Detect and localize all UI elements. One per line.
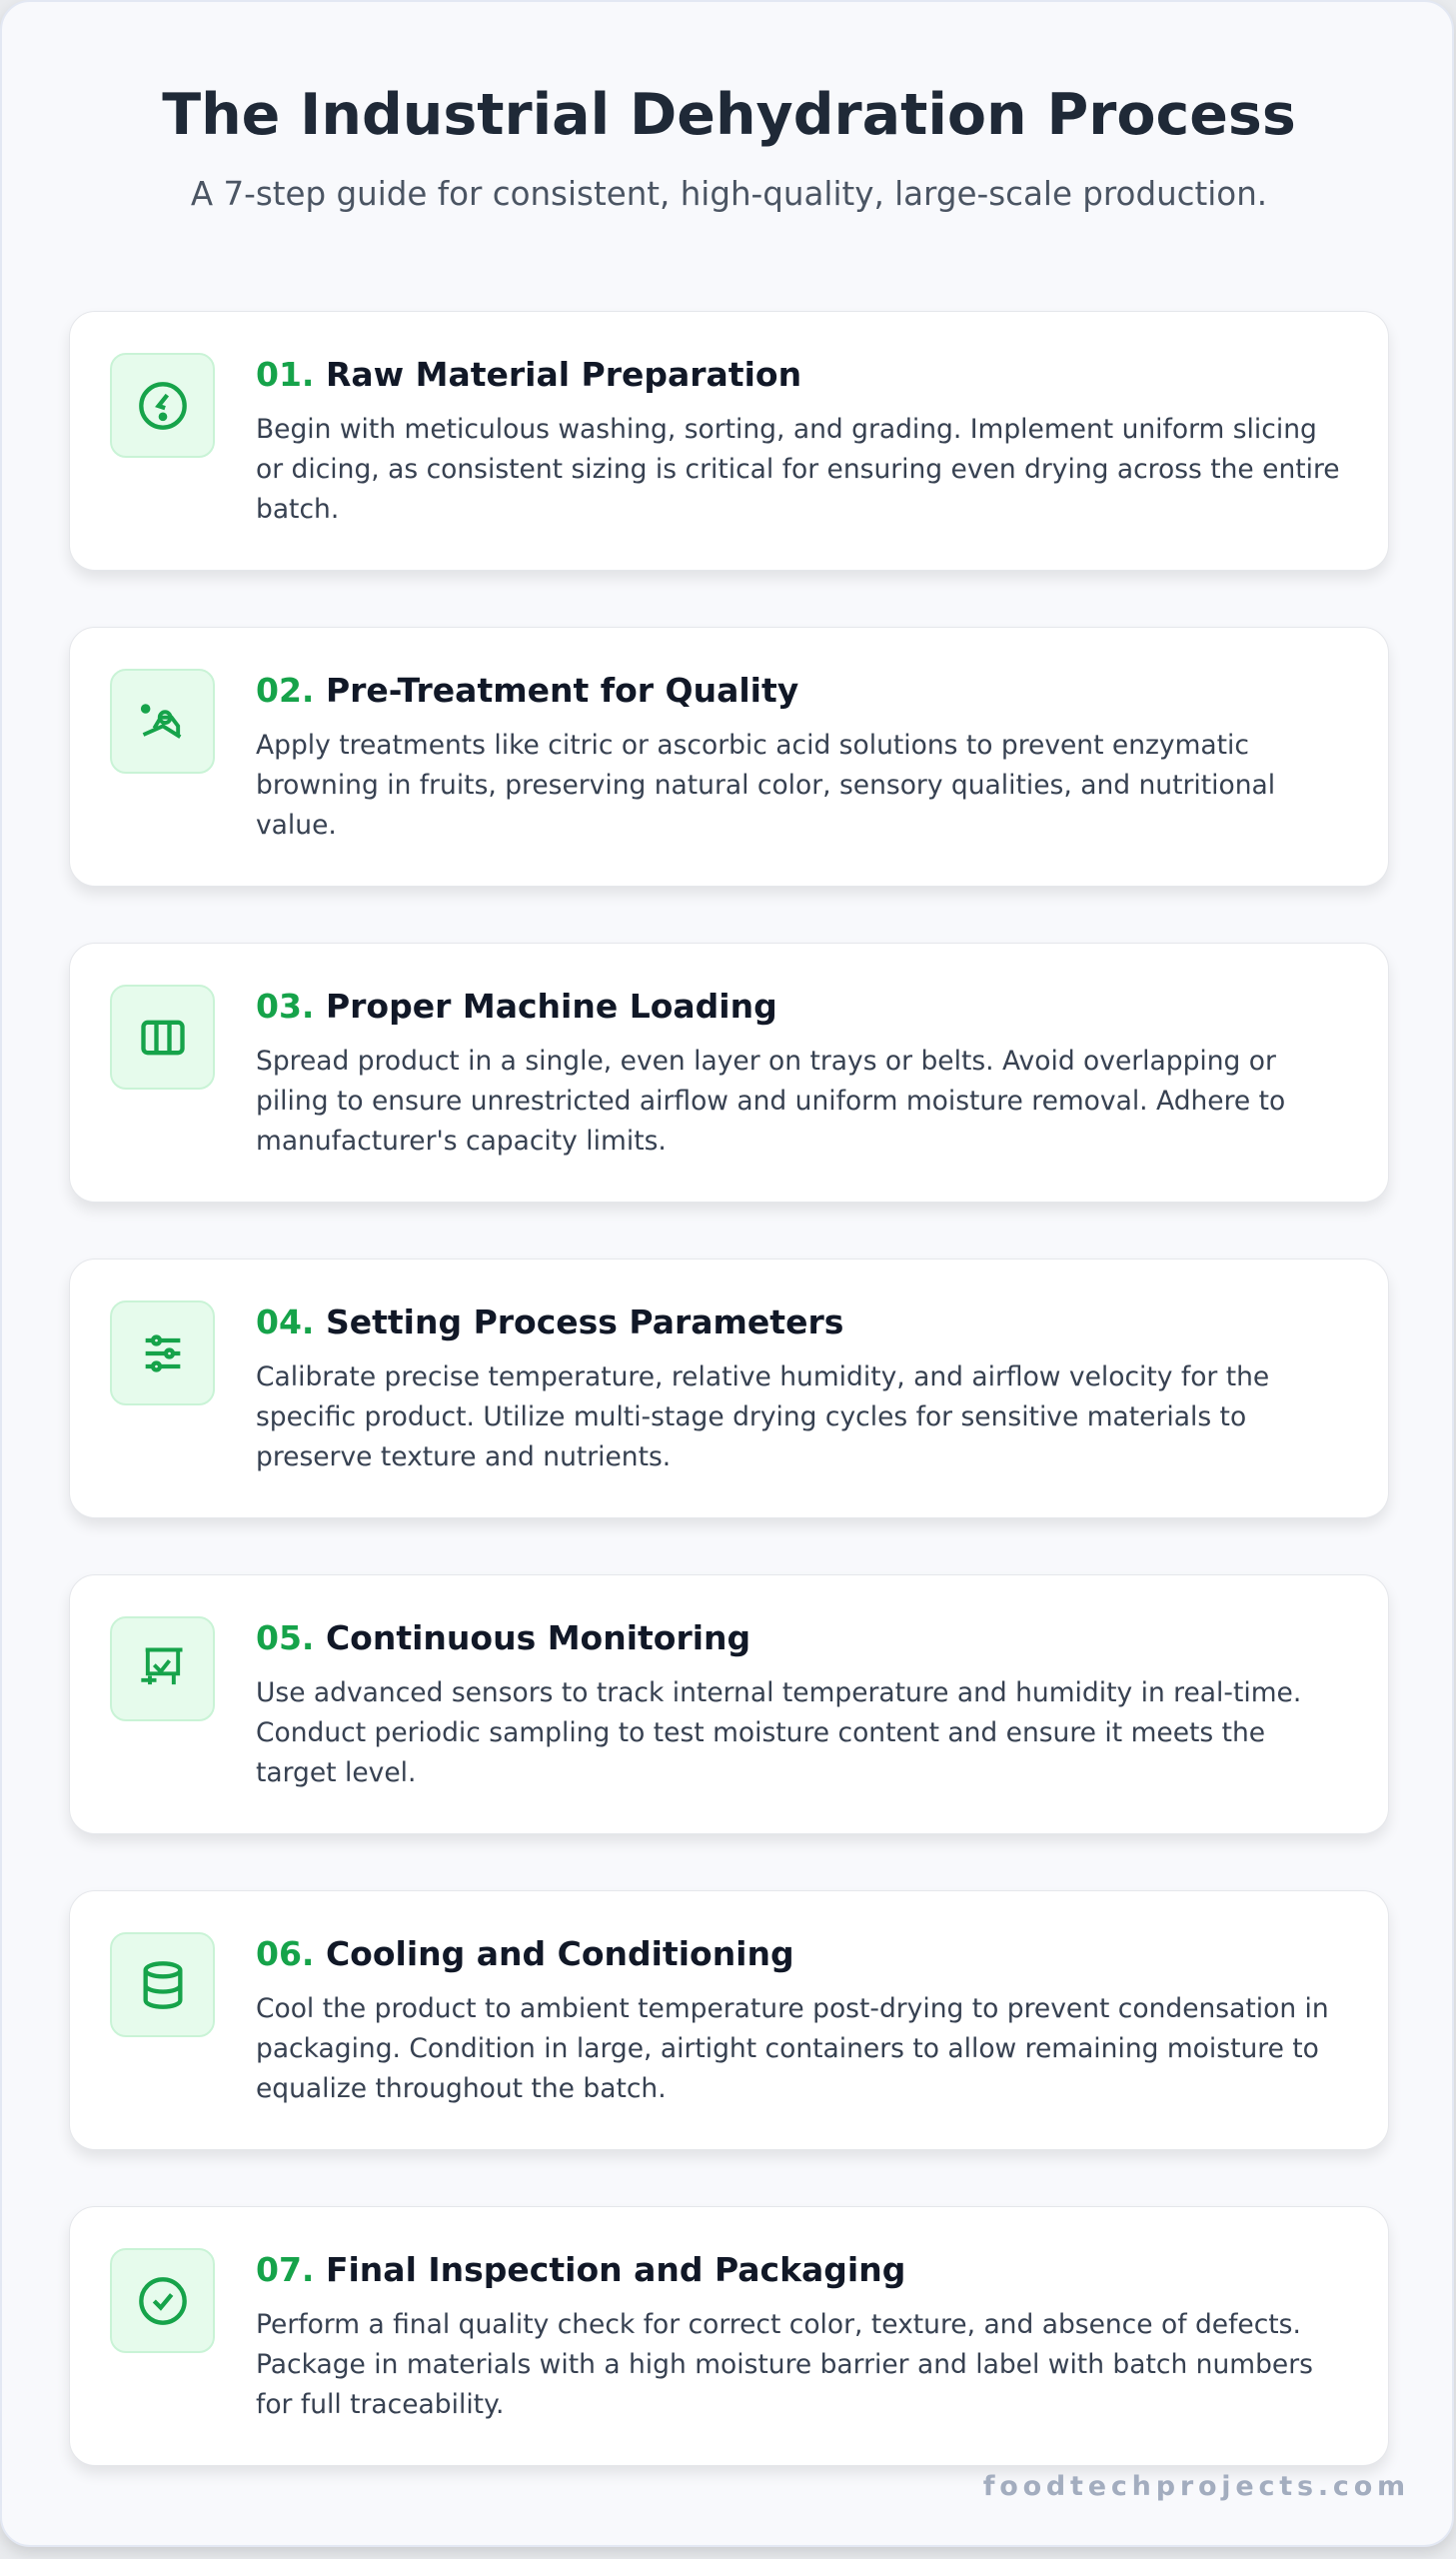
description: Calibrate precise temperature, relative humidity, and airflow velocity for the specific product. Utilize multi-stage drying cycles for sensitive materials to preserve texture and nutrients. xyxy=(256,1361,1269,1472)
icon: monitor xyxy=(110,1616,215,1721)
heading: 03. Proper Machine Loading xyxy=(256,987,777,1026)
card: step 6 xyxy=(69,1890,1389,2150)
card: step 7 xyxy=(69,2206,1389,2466)
icon: compass xyxy=(110,353,215,458)
description: Use advanced sensors to track internal temperature and humidity in real-time. Conduct periodic sampling to test moisture content and ensure it meets the target level. xyxy=(256,1677,1301,1788)
icon: check xyxy=(110,2248,215,2353)
description: Perform a final quality check for correct color, texture, and absence of defects. Package in materials with a high moisture barrier and label with batch numbers for full traceability. xyxy=(256,2309,1313,2420)
subtitle: A 7-step guide for consistent, high-quality, large-scale production. xyxy=(191,175,1267,213)
icon: sliders xyxy=(110,1300,215,1405)
heading: 07. Final Inspection and Packaging xyxy=(256,2250,905,2289)
card: step 2 xyxy=(69,627,1389,887)
heading: 04. Setting Process Parameters xyxy=(256,1302,843,1341)
description: Spread product in a single, even layer on trays or belts. Avoid overlapping or piling to ensure unrestricted airflow and uniform moisture removal. Adhere to manufacturer's capacity limits. xyxy=(256,1046,1285,1157)
heading: 06. Cooling and Conditioning xyxy=(256,1934,794,1973)
card: step 5 xyxy=(69,1574,1389,1834)
description: Apply treatments like citric or ascorbic acid solutions to prevent enzymatic browning in fruits, preserving natural color, sensory qualities, and nutritional value. xyxy=(256,730,1275,841)
title: The Industrial Dehydration Process xyxy=(162,82,1296,148)
heading: 05. Continuous Monitoring xyxy=(256,1618,750,1657)
heading: 02. Pre-Treatment for Quality xyxy=(256,671,798,710)
description: Cool the product to ambient temperature post-drying to prevent condensation in packaging. Condition in large, airtight containers to allow remaining moisture to equalize throughout the batch. xyxy=(256,1993,1329,2104)
heading: 01. Raw Material Preparation xyxy=(256,355,801,394)
card: step 1 xyxy=(69,311,1389,571)
description: Begin with meticulous washing, sorting, and grading. Implement uniform slicing or dicing, as consistent sizing is critical for ensuring even drying across the entire batch. xyxy=(256,414,1340,525)
footer watermark: foodtechprojects.com xyxy=(983,2471,1410,2502)
icon: treatment xyxy=(110,669,215,774)
icon: trays xyxy=(110,985,215,1090)
icon: container xyxy=(110,1932,215,2037)
card: step 3 xyxy=(69,943,1389,1203)
card: step 4 xyxy=(69,1259,1389,1518)
